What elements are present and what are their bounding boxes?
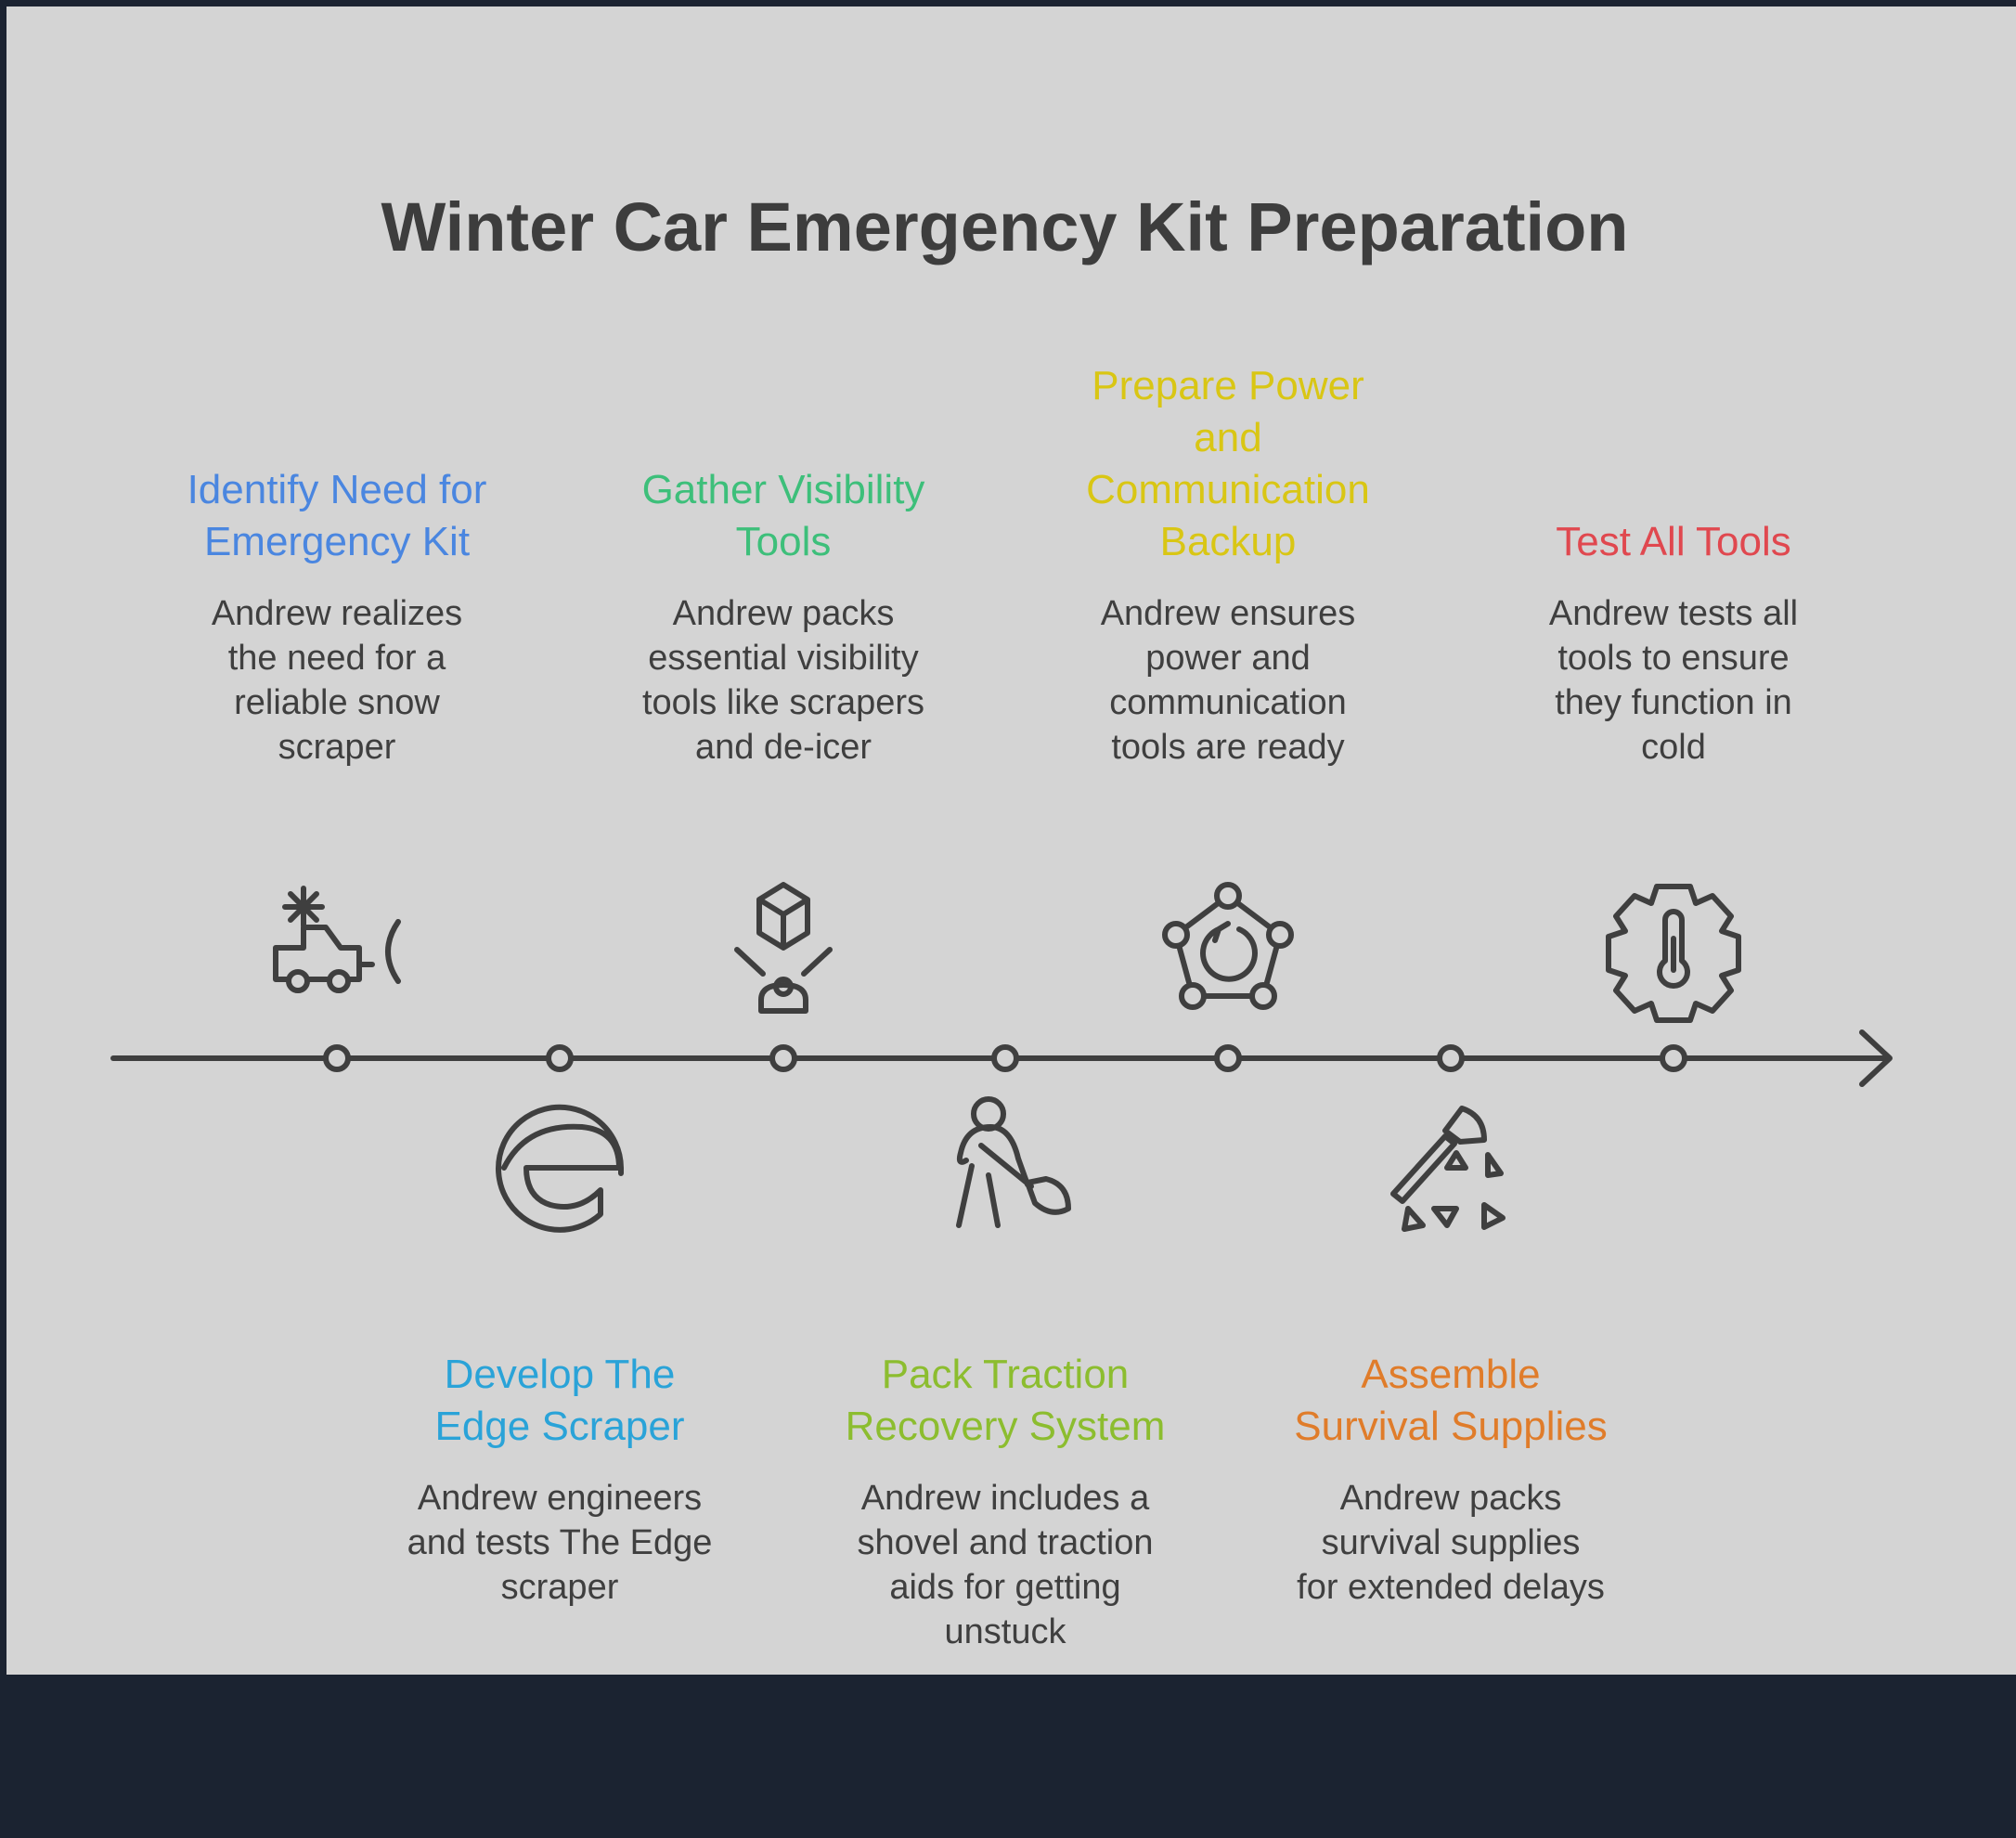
icon: gear with thermometer	[1609, 887, 1738, 1020]
step 1 text: Identify Need: reliable snow	[234, 683, 440, 722]
icon: person shoveling	[959, 1099, 1068, 1225]
step 3 text: Gather Visibility Tools: Tools	[736, 519, 831, 564]
step 5 text: Prepare Power: Backup	[1160, 519, 1296, 564]
step 5 text: Prepare Power: and	[1194, 415, 1262, 460]
step 6 text: Assemble Survival Supplies: Survival Supplies	[1294, 1404, 1608, 1449]
step 3 text: Gather Visibility Tools: essential visibility	[648, 639, 919, 678]
step 3 text: Gather Visibility Tools	[642, 467, 924, 767]
icon: snow plow truck	[276, 888, 398, 990]
step 5 text: Prepare Power: Communication	[1086, 467, 1370, 512]
step 2 text: Develop The Edge Scraper: Andrew engineers	[418, 1479, 702, 1518]
icon: pentagon network	[1165, 885, 1291, 1007]
step 4 text: Pack Traction: unstuck	[945, 1612, 1066, 1651]
timeline arrow	[113, 1032, 1890, 1084]
icon: box with scanner	[737, 885, 830, 1011]
step 3 text: Gather Visibility Tools: Andrew packs	[673, 594, 894, 633]
step 2 text: Develop The Edge Scraper: scraper	[501, 1568, 618, 1607]
step 5 text: Prepare Power: power and	[1145, 639, 1311, 678]
step 7 text: Test All Tools: tools to ensure	[1557, 639, 1790, 678]
step 5 text: Prepare Power: Prepare Power	[1092, 363, 1364, 408]
step 1 text: Identify Need: Emergency Kit	[204, 519, 470, 564]
step 6 text: Assemble Survival Supplies	[1294, 1352, 1608, 1607]
step 3 text: Gather Visibility Tools: tools like scrapers	[642, 683, 924, 722]
step 1 text: Identify Need: Andrew realizes	[212, 594, 462, 633]
step 5 text: Prepare Power: Andrew ensures	[1101, 594, 1355, 633]
step 4 text: Pack Traction	[846, 1352, 1165, 1651]
step 3 text: Gather Visibility Tools: Gather Visibility	[642, 467, 924, 512]
step 1 text: Identify Need: scraper	[278, 728, 395, 767]
step 2 text: Develop The Edge Scraper	[407, 1352, 712, 1607]
step 7 text: Test All Tools: Andrew tests all	[1549, 594, 1798, 633]
step 5 text: Prepare Power	[1086, 363, 1370, 767]
step 3 text: Gather Visibility Tools: and de-icer	[695, 728, 872, 767]
icon: axe and rocks	[1393, 1108, 1503, 1229]
step 5 text: Prepare Power: communication	[1109, 683, 1347, 722]
step 4 text: Pack Traction: shovel and traction	[858, 1523, 1153, 1562]
step 4 text: Pack Traction: aids for getting	[889, 1568, 1121, 1607]
step 1 text: Identify Need: the need for a	[228, 639, 446, 678]
step 1 text: Identify Need: Identify Need for	[187, 467, 486, 512]
icon: edge logo	[498, 1107, 621, 1230]
step 2 text: Develop The Edge Scraper: Edge Scraper	[434, 1404, 685, 1449]
step 4 text: Pack Traction: Recovery System	[846, 1404, 1165, 1449]
step 4 text: Pack Traction: Pack Traction	[882, 1352, 1129, 1397]
step 1 text: Identify Need	[187, 467, 486, 767]
step 4 text: Pack Traction: Andrew includes a	[861, 1479, 1149, 1518]
step 7 text: Test All Tools: cold	[1641, 728, 1706, 767]
step 6 text: Assemble Survival Supplies: Andrew packs	[1340, 1479, 1561, 1518]
title: Winter Car Emergency Kit Preparation	[381, 188, 1629, 265]
step 6 text: Assemble Survival Supplies: for extended delays	[1297, 1568, 1605, 1607]
step 7 text: Test All Tools: Test All Tools	[1556, 519, 1791, 564]
step 2 text: Develop The Edge Scraper: Develop The	[445, 1352, 675, 1397]
step 7 text: Test All Tools: they function in	[1555, 683, 1792, 722]
step 6 text: Assemble Survival Supplies: Assemble	[1361, 1352, 1541, 1397]
step 5 text: Prepare Power: tools are ready	[1111, 728, 1345, 767]
step 7 text: Test All Tools	[1549, 519, 1798, 767]
step 6 text: Assemble Survival Supplies: survival supplies	[1322, 1523, 1580, 1562]
step 2 text: Develop The Edge Scraper: and tests The Edge	[407, 1523, 712, 1562]
